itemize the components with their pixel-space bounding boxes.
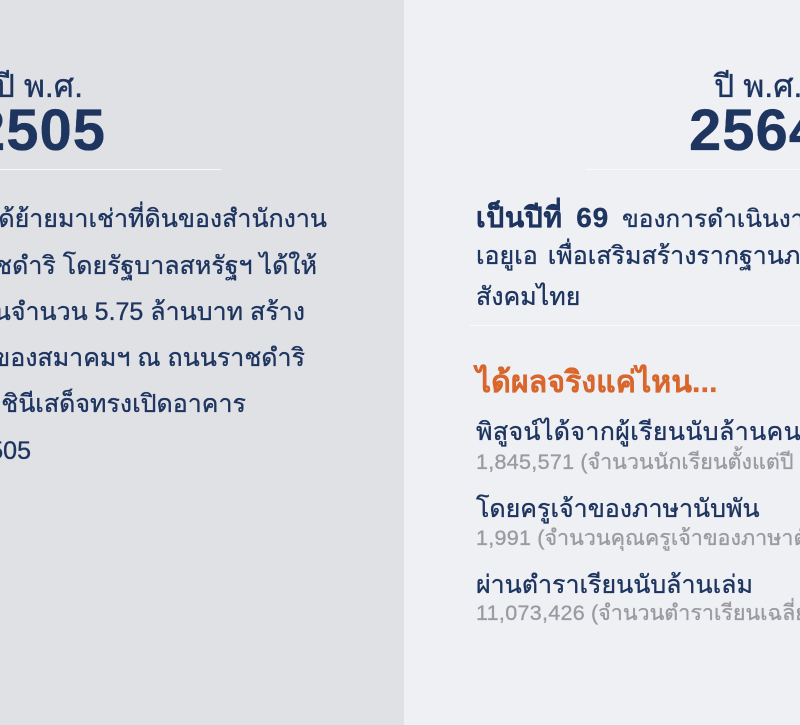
stat: textbooks: 11,073,426 (จำนวนตำราเรียนเฉลี่ย — [476, 601, 800, 625]
text block: 69th year paragraph — [476, 198, 800, 311]
stat: learners: พิสูจน์ได้จากผู้เรียนนับล้านคน — [476, 418, 800, 446]
panel: left 2505 — [0, 0, 404, 725]
divider left — [0, 169, 221, 170]
stat: learners: 1,845,571 (จำนวนนักเรียนตั้งแต่ปี — [476, 450, 793, 474]
stat: textbooks — [476, 571, 800, 625]
stat: textbooks: ผ่านตำราเรียนนับล้านเล่ม — [476, 571, 753, 599]
stat: learners — [476, 417, 800, 474]
stat: native teachers: โดยครูเจ้าของภาษานับพัน — [476, 495, 760, 523]
text block: history paragraph: ของสมาคมฯ ณ ถนนราชดำริ — [0, 344, 305, 372]
text block: history paragraph — [0, 201, 327, 465]
stat: native teachers — [476, 494, 800, 551]
divider middle right — [470, 325, 800, 326]
heading: year label right: ปี พ.ศ. — [714, 68, 800, 104]
panel: right 2564 — [404, 0, 800, 725]
text block: 69th year paragraph: เป็นปีที่ 69 — [476, 202, 609, 233]
heading: results question: ได้ผลจริงแค่ไหน... — [476, 366, 718, 399]
divider top right — [586, 169, 800, 170]
text block: 69th year paragraph: สังคมไทย — [476, 283, 580, 311]
